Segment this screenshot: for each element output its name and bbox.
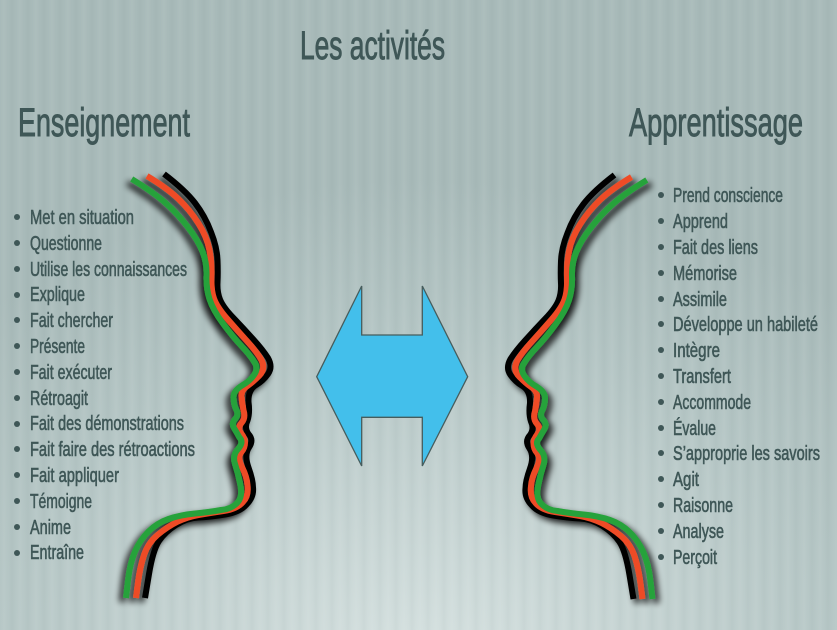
item: Intègre: Intègre [673,340,720,362]
item: Raisonne: Raisonne [673,495,733,517]
item: Analyse [658,521,724,543]
item: Met en situation [14,207,134,229]
item: Prend conscience [658,185,783,207]
item: Fait chercher: Fait chercher [30,310,113,332]
item: Transfert: Transfert [673,366,731,388]
item: Agit: Agit [673,469,699,491]
item: Anime [14,517,71,539]
item: Rétroagit: Rétroagit [30,388,88,410]
list: Enseignement activities [14,207,195,564]
item: Fait exécuter: Fait exécuter [30,362,112,384]
item: Évalue [658,417,716,440]
heading: Enseignement: Enseignement [18,101,190,145]
item: Entraîne: Entraîne [30,542,84,564]
item: Analyse: Analyse [673,521,724,543]
item: Transfert [658,366,731,388]
item: Rétroagit [14,388,88,410]
item: Raisonne [658,495,733,517]
icon: right face profile [508,175,652,599]
list: Apprentissage activities [658,185,820,569]
item: Perçoit [658,547,717,569]
item: Fait des liens [658,237,758,259]
item: Explique: Explique [30,284,85,306]
item: Fait faire des rétroactions [14,439,195,461]
item: Assimile [658,289,727,311]
item: Anime: Anime [30,517,71,539]
item: Intègre [658,340,720,362]
item: Fait chercher [14,310,113,332]
item: Mémorise [658,263,737,285]
item: Mémorise: Mémorise [673,263,737,285]
item: Évalue: Évalue [673,417,716,440]
item: Questionne [14,233,102,255]
arrow: double-headed blue arrow [317,286,468,466]
item: Accommode: Accommode [673,392,751,414]
item: Agit [658,469,699,491]
item: Fait appliquer: Fait appliquer [30,465,119,487]
item: Fait exécuter [14,362,112,384]
item: Fait des liens: Fait des liens [673,237,758,259]
item: Entraîne [14,542,84,564]
item: Perçoit: Perçoit [673,547,717,569]
item: Met en situation: Met en situation [30,207,134,229]
item: Témoigne [14,491,92,513]
icon: left face profile [126,174,270,598]
item: Présente [14,336,85,358]
item: Utilise les connaissances: Utilise les connaissances [30,259,187,281]
item: Utilise les connaissances [14,259,187,281]
item: Apprend: Apprend [673,211,728,233]
item: Témoigne: Témoigne [30,491,92,513]
item: Présente: Présente [30,336,85,358]
item: Fait des démonstrations: Fait des démonstrations [30,413,184,435]
item: Questionne: Questionne [30,233,102,255]
item: Fait faire des rétroactions: Fait faire des rétroactions [30,439,195,461]
item: Apprend [658,211,728,233]
title: Les activités [300,24,445,68]
item: Assimile: Assimile [673,289,727,311]
item: Prend conscience: Prend conscience [673,185,783,207]
item: Explique [14,284,85,306]
item: Fait appliquer [14,465,119,487]
item: Accommode [658,392,751,414]
item: Fait des démonstrations [14,413,184,435]
